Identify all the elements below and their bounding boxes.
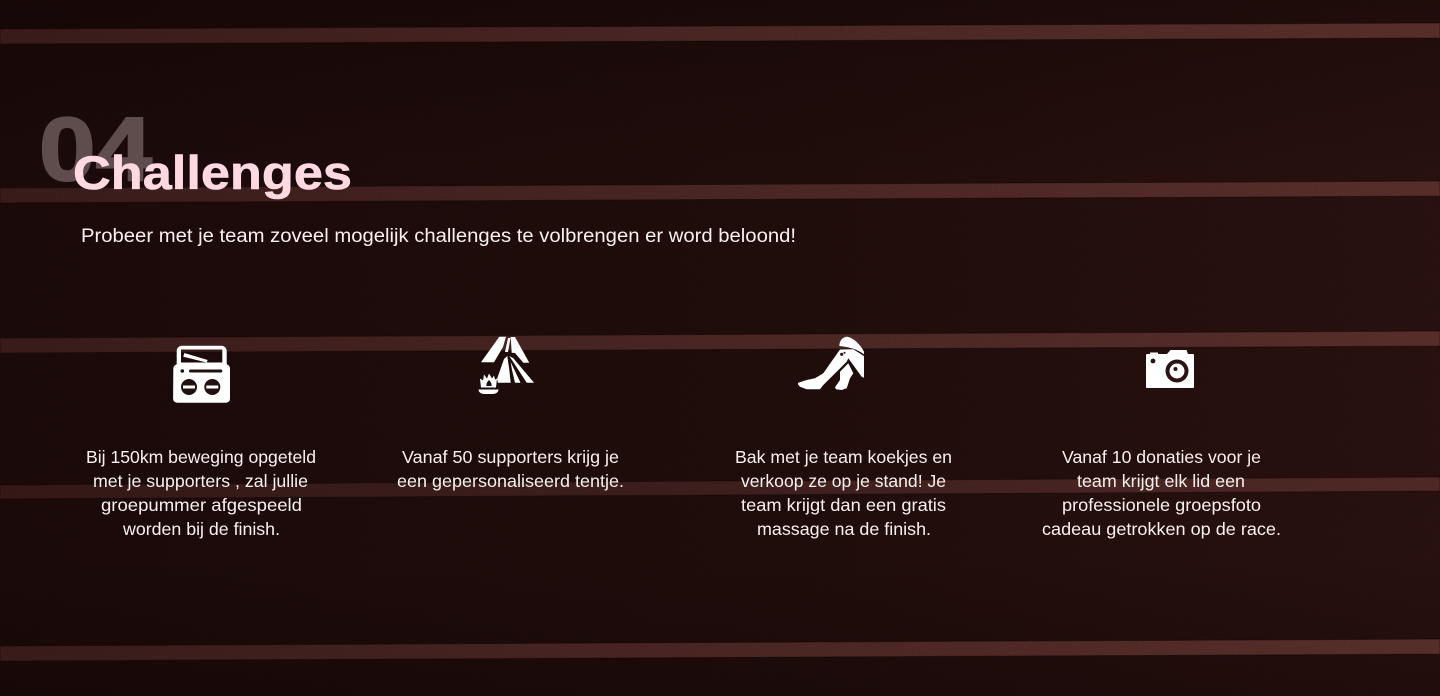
title: Challenges [73, 146, 352, 199]
text: photo: team krijgt elk lid een [1077, 471, 1245, 491]
text: photo: professionele groepsfoto [1062, 495, 1261, 515]
text: radio: Bij 150km beweging opgeteld [86, 447, 316, 467]
text: tent: Vanaf 50 supporters krijg je [402, 447, 619, 467]
intro text: Probeer met je team zoveel mogelijk challenges te volbrengen er word beloond! [81, 226, 796, 247]
text: massage [735, 447, 952, 539]
icon: camera [1146, 350, 1194, 388]
text: radio: worden bij de finish. [122, 519, 280, 539]
text: tent [397, 447, 624, 491]
text: photo [1042, 447, 1281, 539]
challenge: tent [397, 337, 624, 491]
icon: radio [173, 346, 230, 403]
text: massage: Bak met je team koekjes en [735, 447, 952, 467]
text: photo: cadeau getrokken op de race. [1042, 519, 1281, 539]
text: radio: met je supporters , zal jullie [93, 471, 308, 491]
text: radio: groepummer afgespeeld [101, 495, 302, 515]
text: tent: een gepersonaliseerd tentje. [397, 471, 624, 491]
icon: legs [798, 337, 864, 390]
text: massage: verkoop ze op je stand! Je [741, 471, 946, 491]
text: photo: Vanaf 10 donaties voor je [1062, 447, 1261, 467]
text: radio [86, 447, 316, 539]
challenge: massage [735, 337, 952, 539]
section number: 04 [39, 100, 152, 200]
text: massage: team krijgt dan een gratis [741, 495, 946, 515]
challenge: photo [1042, 350, 1281, 539]
icon: tents and campfire [478, 337, 534, 394]
text: massage: massage na de finish. [757, 519, 931, 539]
challenge: radio [86, 346, 316, 539]
